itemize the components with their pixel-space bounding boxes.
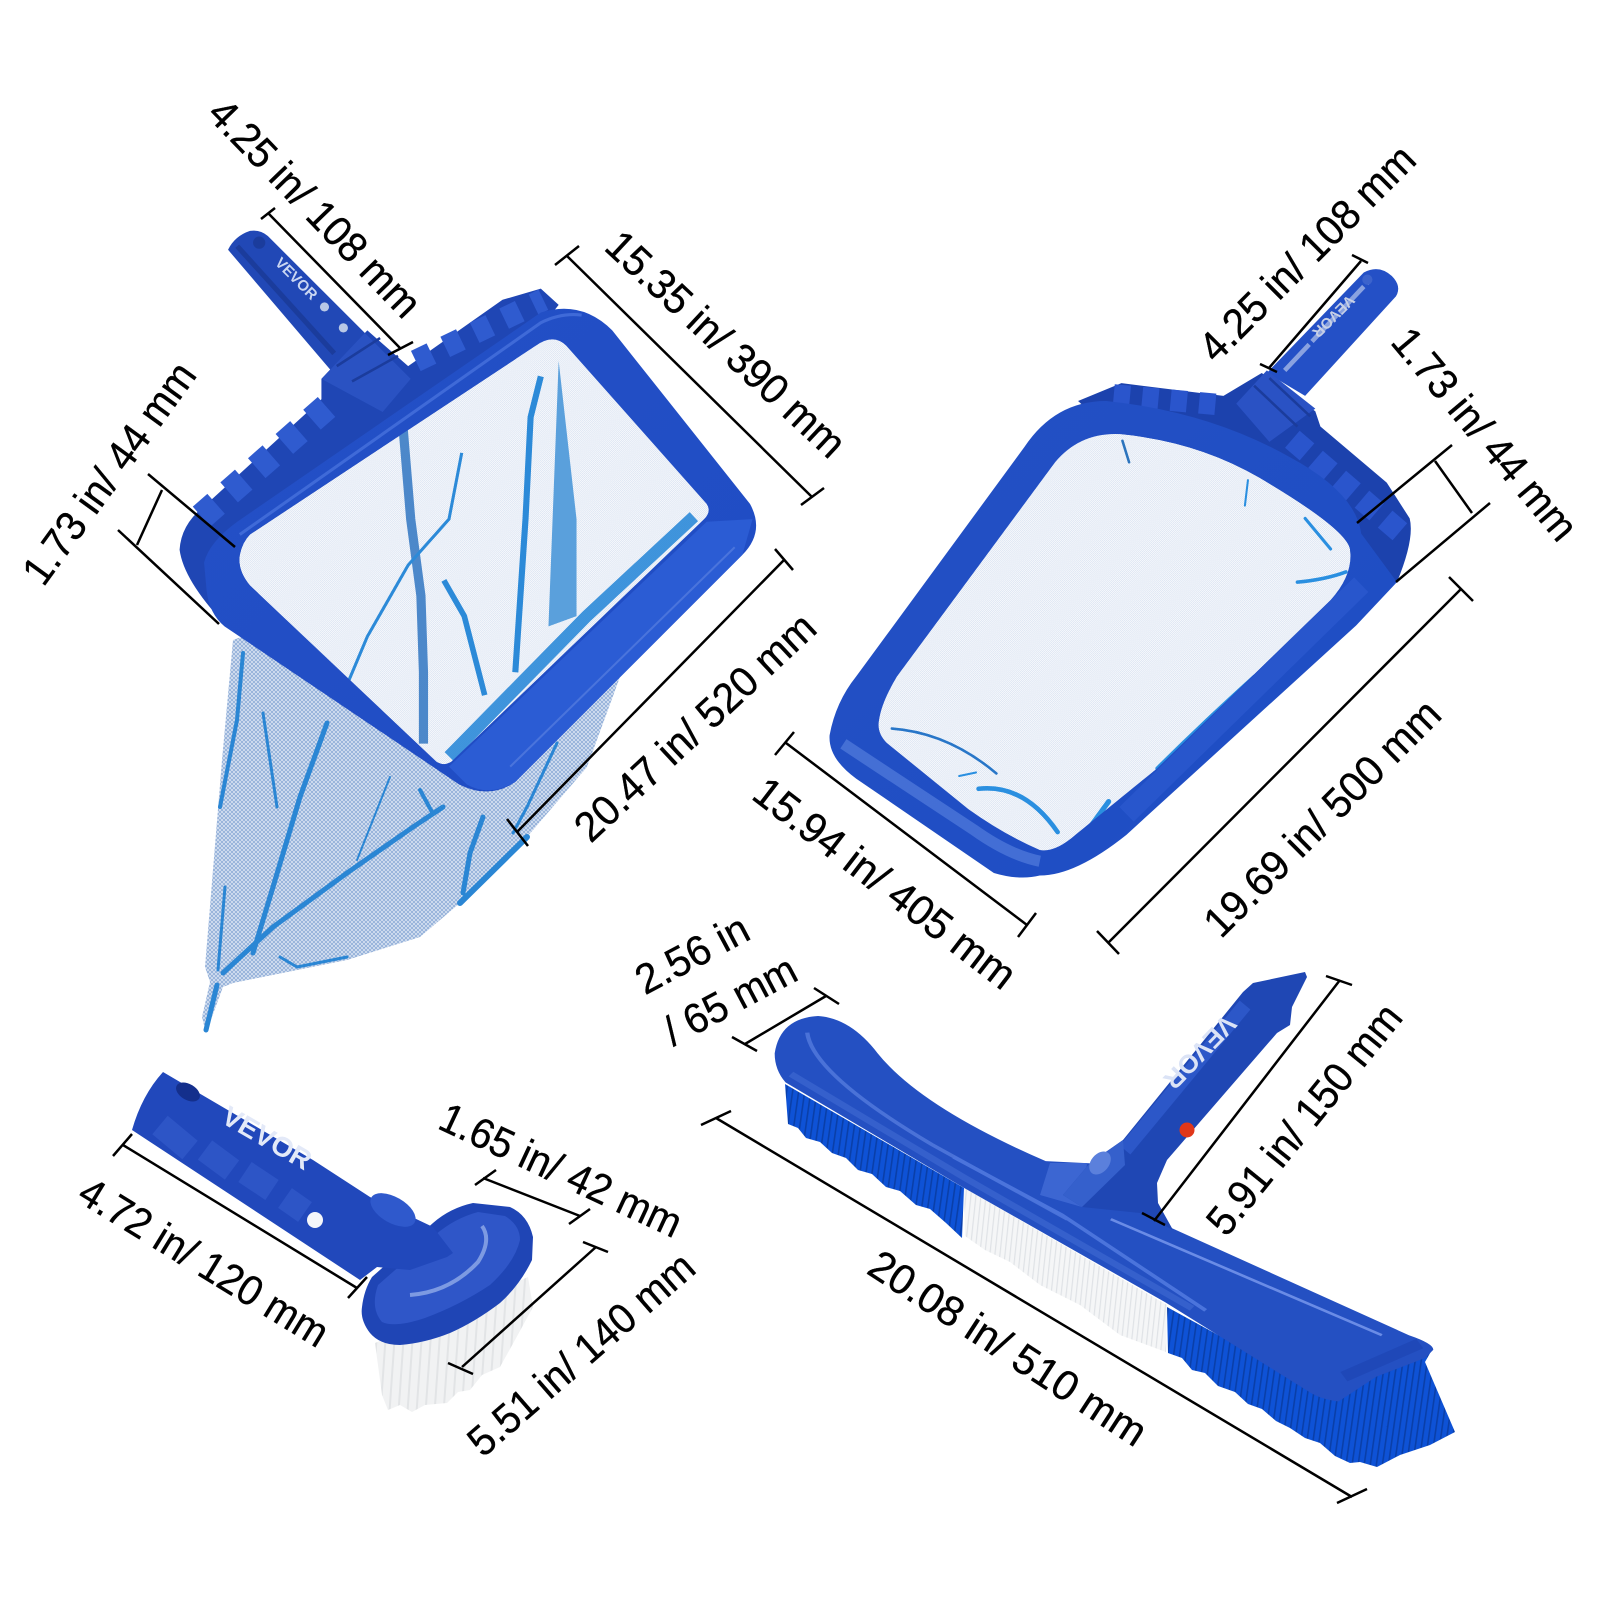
dimension: skimmer 1 length	[507, 549, 825, 851]
handle socket	[228, 231, 370, 371]
dimension: wall brush head width: / 65 mm	[655, 945, 805, 1055]
dimension: corner brush disc: 1.65 in/ 42 mm	[432, 1093, 690, 1247]
brush head	[775, 1016, 1433, 1402]
product: flat leaf skimmer	[830, 269, 1411, 878]
dimension: skimmer 2 length	[1097, 577, 1473, 954]
dimension: corner brush handle length: 4.72 in/ 120 mm	[71, 1168, 337, 1356]
dimension: wall brush length	[701, 1111, 1367, 1503]
dimension: skimmer 2 handle width: 4.25 in/ 108 mm	[1189, 135, 1425, 371]
logo: VEVOR	[1157, 1009, 1242, 1095]
dimension: skimmer 2 depth: 1.73 in/ 44 mm	[1382, 318, 1588, 550]
logo: VEVOR	[217, 1100, 317, 1176]
net opening	[239, 339, 709, 764]
product: small corner brush	[132, 1072, 533, 1412]
net folds	[892, 441, 1346, 832]
white bristles	[375, 1277, 533, 1412]
net bag hanging below frame	[202, 560, 620, 1033]
product: leaf skimmer with deep bag	[180, 231, 756, 1033]
white bristles	[964, 1188, 1167, 1352]
ribbed back of frame	[180, 289, 559, 624]
dimension: skimmer 2 width: 15.94 in/ 405 mm	[745, 768, 1025, 998]
dimension: skimmer 1 frame width: 15.35 in/ 390 mm	[597, 221, 855, 467]
dimension: corner brush width: 5.51 in/ 140 mm	[458, 1243, 704, 1465]
blue bristles left	[785, 1084, 964, 1238]
handle socket	[1267, 269, 1398, 396]
logo: VEVOR	[1308, 291, 1358, 341]
dimension: wall brush head width: 2.56 in	[627, 905, 757, 1003]
logo: VEVOR	[271, 254, 321, 304]
brush disc	[362, 1203, 533, 1345]
blue bristles right	[1167, 1307, 1455, 1467]
brush handle	[132, 1072, 453, 1280]
frame	[830, 401, 1397, 878]
dimension: wall brush head width	[627, 905, 839, 1055]
frame	[204, 309, 756, 792]
product: long wall brush	[775, 972, 1455, 1467]
dimension: skimmer 1 handle width: 4.25 in/ 108 mm	[199, 89, 431, 327]
net folds	[347, 361, 694, 756]
dimension: wall brush handle height: 5.91 in/ 150 mm	[1197, 994, 1411, 1244]
red button	[1180, 1122, 1194, 1138]
net opening	[879, 434, 1350, 850]
dimension: skimmer 1 length: 20.47 in/ 520 mm	[565, 603, 825, 851]
dimension: skimmer 1 depth: 1.73 in/ 44 mm	[13, 353, 205, 593]
handle	[1040, 972, 1307, 1230]
dimension: wall brush length: 20.08 in/ 510 mm	[860, 1241, 1156, 1455]
ribbed back of frame	[1078, 370, 1411, 582]
dimension: skimmer 2 length: 19.69 in/ 500 mm	[1194, 690, 1450, 946]
